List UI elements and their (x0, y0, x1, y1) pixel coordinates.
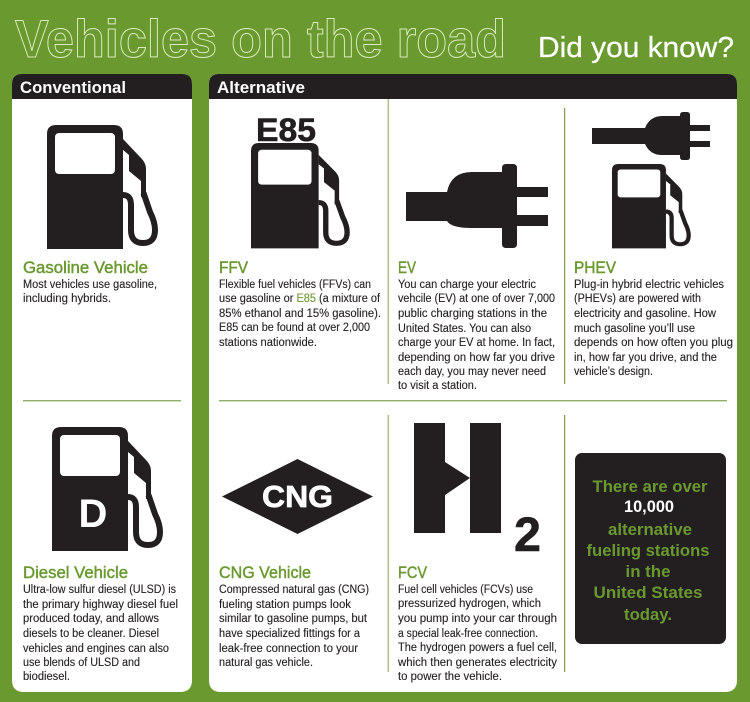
panel: conventional (12, 74, 192, 692)
text: gasoline vehicle: Most vehicles use gasoline, (23, 279, 157, 291)
text: PHEV: electricity and gasoline. How (574, 308, 717, 320)
callout: 10,000 stations: There are over (592, 478, 708, 496)
text: FFV: stations nationwide. (219, 337, 317, 349)
text: diesel vehicle: use blends of ULSD and (23, 657, 140, 669)
icon: diesel pump (52, 427, 160, 551)
text: diesel vehicle: biodiesel. (23, 671, 70, 683)
heading: PHEV: PHEV (574, 258, 617, 277)
text: diesel vehicle: vehicles and engines can also (23, 643, 169, 655)
text: EV: each day, you may never need (398, 366, 546, 378)
text: CNG vehicle: similar to gasoline pumps, but (219, 613, 368, 625)
callout: 10,000 stations (575, 453, 726, 644)
text: gasoline vehicle: including hybrids. (23, 293, 111, 305)
text: FFV: E85 can be found at over 2,000 (219, 322, 370, 334)
text: EV: charge your EV at home. In fact, (398, 337, 555, 349)
callout: 10,000 stations: in the (626, 563, 670, 581)
text: CNG vehicle: leak-free connection to your (219, 643, 358, 655)
callout: 10,000 stations: today. (624, 606, 672, 624)
text: FCV: which then generates electricity (397, 657, 557, 669)
text: diesel vehicle: diesels to be cleaner. Diesel (23, 628, 159, 640)
icon: E85 pump: E85 (256, 112, 316, 148)
text: FCV: you pump into your car through (398, 613, 557, 625)
callout: 10,000 stations: fueling stations (586, 542, 710, 560)
text: FCV: to power the vehicle. (398, 671, 502, 683)
text: diesel vehicle: produced today, and allows (23, 613, 159, 625)
icon: PHEV plug and pump (592, 112, 710, 248)
text: FFV: Flexible fuel vehicles (FFVs) can (219, 279, 371, 291)
text: EV: vehcile (EV) at one of over 7,000 (398, 293, 555, 305)
icon: E85 pump (251, 112, 347, 248)
icon: CNG diamond: CNG (262, 479, 333, 514)
icon: EV plug (406, 164, 548, 248)
icon: H2 (414, 423, 541, 562)
text: diesel vehicle (23, 584, 178, 683)
text: PHEV: depends on how often you plug (574, 337, 733, 349)
text: FCV: The hydrogen powers a fuel cell, (398, 642, 557, 654)
text: FCV: a special leak-free connection. (398, 628, 538, 640)
heading: EV: EV (398, 258, 417, 277)
text: FCV (397, 584, 557, 683)
callout: 10,000 stations: 10,000 (624, 498, 674, 516)
text: PHEV (574, 279, 733, 378)
text: CNG vehicle (219, 584, 369, 669)
title: Vehicles on the road (15, 10, 506, 69)
text: EV (398, 279, 555, 392)
text: FCV: pressurized hydrogen, which (398, 598, 541, 610)
text: FCV: Fuel cell vehicles (FCVs) use (398, 584, 533, 596)
heading: gasoline vehicle: Gasoline Vehicle (23, 258, 148, 277)
text: PHEV: (PHEVs) are powered with (574, 293, 701, 305)
text: FFV (219, 279, 381, 349)
text: PHEV: vehicle’s design. (574, 366, 653, 378)
text: EV: public charging stations in the (398, 308, 547, 320)
text: gasoline vehicle (23, 279, 157, 305)
callout: 10,000 stations: United States (594, 584, 702, 602)
icon: diesel pump: D (79, 492, 107, 536)
text: CNG vehicle: have specialized fittings for a (219, 628, 361, 640)
panel: alternative (209, 74, 737, 692)
icon: H2: 2 (514, 509, 541, 562)
text: EV: United States. You can also (398, 323, 531, 335)
icon: CNG diamond (222, 459, 373, 534)
callout: 10,000 stations: alternative (608, 521, 692, 539)
text: EV: You can charge your electric (398, 279, 536, 291)
icon: gasoline pump (47, 125, 155, 249)
text: diesel vehicle: the primary highway diesel fuel (23, 599, 178, 611)
text: EV: depending on how far you drive (398, 352, 555, 364)
text: CNG vehicle: fueling station pumps look (219, 599, 351, 611)
text: FFV: use gasoline or E85 (a mixture of (219, 293, 381, 305)
text: PHEV: much gasoline you’ll use (574, 323, 695, 335)
heading: diesel vehicle: Diesel Vehicle (23, 563, 128, 582)
text: PHEV: in, how far you drive, and the (574, 352, 717, 364)
heading: FFV: FFV (219, 258, 249, 277)
text: CNG vehicle: natural gas vehicle. (219, 657, 313, 669)
subtitle: did you know: Did you know? (538, 32, 734, 64)
text: FFV: 85% ethanol and 15% gasoline). (219, 308, 381, 320)
heading: FCV: FCV (398, 563, 428, 582)
text: diesel vehicle: Ultra-low sulfur diesel (ULSD) is (23, 584, 176, 596)
heading: conventional: Conventional (20, 78, 126, 97)
heading: CNG vehicle: CNG Vehicle (219, 563, 311, 582)
heading: alternative: Alternative (217, 78, 305, 97)
text: PHEV: Plug-in hybrid electric vehicles (574, 279, 724, 291)
text: CNG vehicle: Compressed natural gas (CNG) (219, 584, 369, 596)
text: EV: to visit a station. (398, 380, 477, 392)
